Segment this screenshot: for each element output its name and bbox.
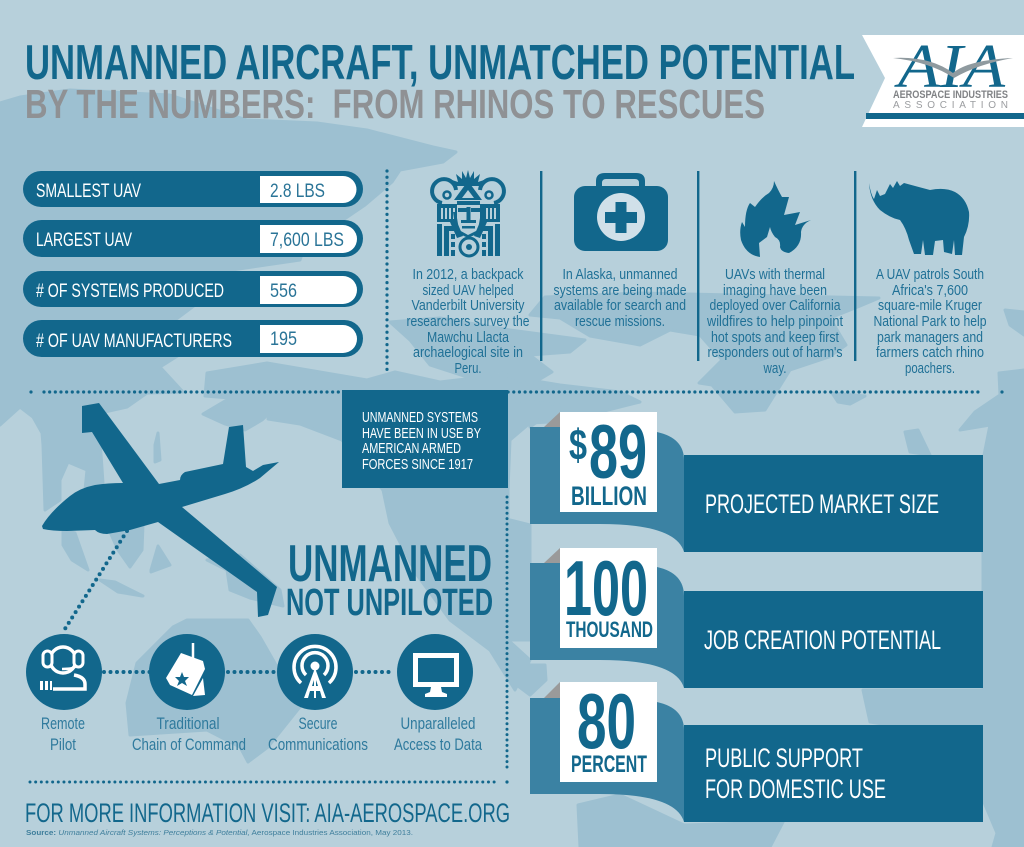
panel: market size: 89 — [589, 410, 647, 495]
stat: smallest UAV — [23, 171, 363, 207]
callout: history box: UNMANNED SYSTEMS — [362, 409, 478, 426]
icon: flame — [740, 181, 811, 257]
panel: job creation: THOUSAND — [566, 617, 653, 642]
text block: Alaska: systems are being made — [554, 283, 686, 299]
panel: job creation: 100 — [564, 544, 648, 632]
icon: dog tags — [149, 634, 225, 710]
text block: Peru: Peru. — [454, 361, 482, 377]
icon: communications tower — [277, 634, 353, 710]
text block: Kruger rhino patrol: poachers. — [905, 361, 955, 377]
stat: manufacturers: # OF UAV MANUFACTURERS — [36, 331, 232, 352]
label: secure communications: Secure — [298, 715, 338, 733]
label: secure communications: Communications — [268, 736, 368, 754]
label: remote pilot — [41, 715, 85, 754]
text block: Kruger rhino patrol — [874, 267, 986, 377]
text block: Peru: Mawchu Llacta — [427, 330, 510, 346]
logo: Aerospace Industries Association — [862, 33, 1024, 127]
stat: systems produced: 556 — [270, 281, 297, 302]
callout: history box: HAVE BEEN IN USE BY — [362, 425, 481, 442]
text block: California wildfires: imaging have been — [723, 283, 827, 299]
icon: medical kit — [574, 173, 668, 251]
stat: largest UAV: 7,600 LBS — [270, 230, 344, 251]
subtitle: by the numbers: BY THE NUMBERS: FROM RHINOS TO RESCUES — [25, 81, 765, 127]
stat: manufacturers: 195 — [270, 329, 297, 350]
label: traditional chain of command: Traditional — [156, 715, 220, 733]
label: secure communications — [268, 715, 368, 754]
text block: Kruger rhino patrol: square-mile Kruger — [878, 298, 982, 314]
text block: Alaska: rescue missions. — [575, 314, 665, 330]
text block: Alaska: In Alaska, unmanned — [562, 267, 678, 283]
stat: systems produced — [23, 271, 363, 307]
stat: largest UAV — [23, 220, 363, 257]
text block: California wildfires — [706, 267, 843, 377]
callout: history box — [342, 390, 508, 488]
logo: Aerospace Industries Association: ASSOCIATION — [893, 100, 1008, 111]
text block: California wildfires: responders out of harm's — [708, 345, 842, 361]
heading: unmanned not unpiloted — [286, 535, 493, 624]
icon: monitor — [397, 634, 473, 710]
icon: rhino — [869, 181, 969, 255]
text block: Kruger rhino patrol: park managers and — [877, 330, 983, 346]
text block: California wildfires: UAVs with thermal — [725, 267, 825, 283]
icon: drone silhouette — [42, 403, 279, 617]
label: traditional chain of command: Chain of Command — [132, 736, 246, 754]
stat: smallest UAV: SMALLEST UAV — [36, 181, 141, 202]
panel: market size: $ — [569, 421, 587, 470]
text block: California wildfires: deployed over California — [710, 298, 841, 314]
callout: history box: AMERICAN ARMED — [362, 440, 461, 457]
panel: public support: PERCENT — [571, 751, 647, 778]
text block: Alaska — [554, 267, 686, 330]
text block: Peru: researchers survey the — [406, 314, 530, 330]
text block: California wildfires: way. — [763, 361, 786, 377]
text block: Alaska: available for search and — [554, 298, 686, 314]
icon: remote pilot — [26, 634, 102, 710]
panel: market size — [530, 410, 983, 552]
stat: systems produced: # OF SYSTEMS PRODUCED — [36, 281, 224, 302]
panel: public support: FOR DOMESTIC USE — [705, 774, 886, 804]
heading: unmanned not unpiloted: NOT UNPILOTED — [286, 582, 493, 624]
panel: public support: 80 — [577, 677, 636, 765]
logo: Aerospace Industries Association: AIA — [894, 33, 1006, 101]
text block: Peru: archaelogical site in — [413, 345, 523, 361]
text block: Peru: sized UAV helped — [422, 283, 514, 299]
label: unparalleled access to data — [394, 715, 483, 754]
text block: Kruger rhino patrol: A UAV patrols South — [876, 267, 984, 283]
text block: Peru — [406, 267, 530, 377]
text block: Peru: Vanderbilt University — [412, 298, 525, 314]
stat: largest UAV: LARGEST UAV — [36, 230, 132, 251]
panel: public support: PUBLIC SUPPORT — [705, 743, 863, 773]
stat: manufacturers — [23, 320, 363, 357]
panel: job creation — [530, 544, 983, 688]
text block: Kruger rhino patrol: National Park to help — [874, 314, 986, 330]
text block: California wildfires: hot spots and keep first — [711, 330, 839, 346]
panel: market size: BILLION — [571, 481, 647, 511]
text block: Peru: In 2012, a backpack — [412, 267, 524, 283]
icon: mayan mask — [432, 170, 504, 256]
label: remote pilot: Pilot — [50, 736, 76, 754]
label: unparalleled access to data: Access to Data — [394, 736, 483, 754]
label: traditional chain of command — [132, 715, 246, 754]
heading: unmanned not unpiloted: UNMANNED — [288, 535, 492, 593]
text block: California wildfires: wildfires to help pinpoint — [706, 314, 843, 330]
text block: Kruger rhino patrol: Africa's 7,600 — [892, 283, 968, 299]
stat pills — [23, 171, 363, 357]
source line: Source: Unmanned Aircraft Systems: Perceptions & Potential, Aerospace Industries Association, May 2013. — [26, 828, 413, 837]
footer link text: FOR MORE INFORMATION VISIT: AIA-AEROSPACE.ORG — [25, 798, 510, 828]
stat: smallest UAV: 2.8 LBS — [270, 181, 325, 202]
label: unparalleled access to data: Unparalleled — [400, 715, 476, 733]
text block: Kruger rhino patrol: farmers catch rhino — [876, 345, 984, 361]
callout: history box: FORCES SINCE 1917 — [362, 456, 473, 473]
panel: public support — [530, 677, 983, 822]
label: remote pilot: Remote — [41, 715, 85, 733]
